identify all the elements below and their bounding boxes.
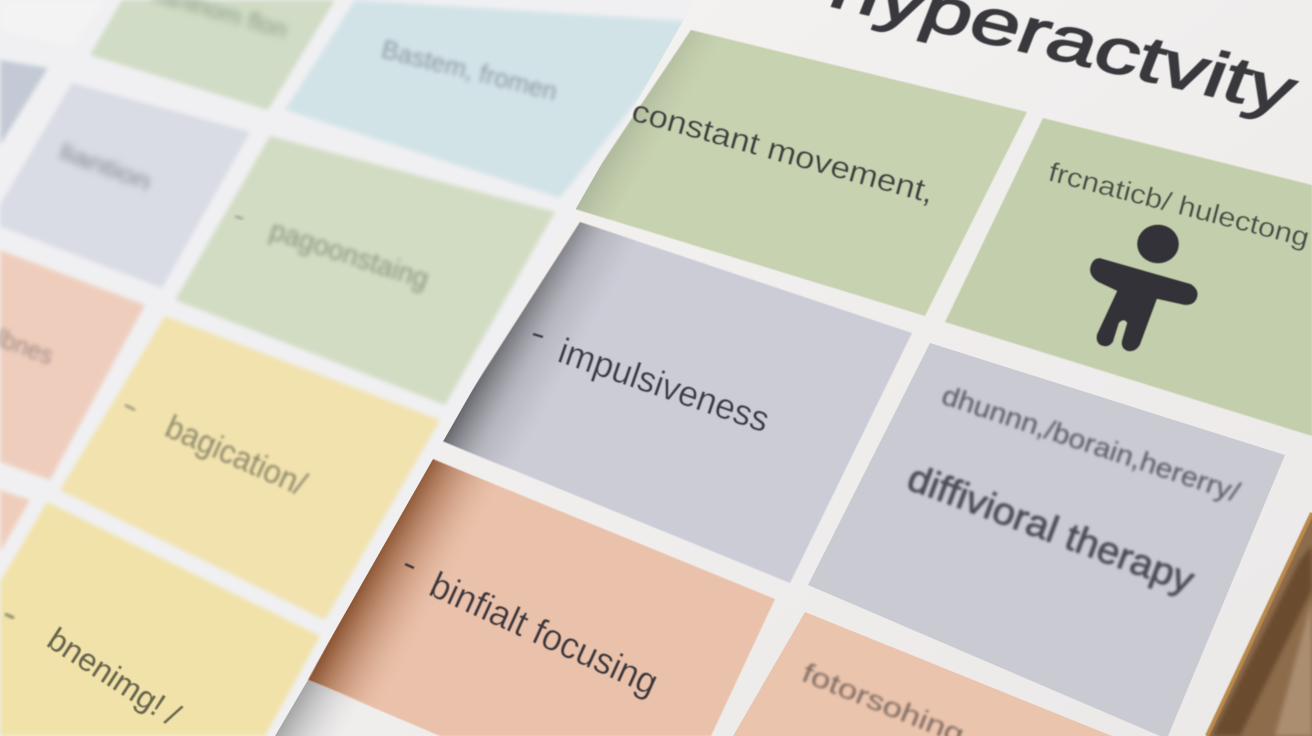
- cell: icon card: [945, 118, 1312, 436]
- label: therapy small text: dhunnn,/borain,hererry/: [938, 379, 1244, 508]
- cell: top corner: [0, 0, 105, 48]
- right sheet: [275, 0, 1312, 736]
- label: focusing: binfialt focusing: [424, 564, 665, 703]
- cell: bottom peach: [733, 612, 1112, 736]
- label: bottom peach text: fotorsohing: [798, 657, 969, 736]
- blurred left text: pagoonstaing: [266, 214, 433, 296]
- sheet golden edge: [1207, 513, 1312, 736]
- blurred left text: bnenimg! /: [41, 621, 187, 733]
- cell: top green: [90, 0, 335, 110]
- wood table: [1190, 500, 1312, 736]
- bullet dash: [533, 334, 543, 337]
- cell: peach left: [0, 250, 145, 480]
- cell: mid green: [175, 136, 555, 405]
- label: therapy heading: diffivioral therapy: [902, 457, 1199, 602]
- cell: impulsiveness: [440, 222, 912, 583]
- left sheet: [0, 0, 700, 736]
- blurred left text: [0, 0, 560, 733]
- blurred left text: bagication/: [160, 408, 313, 503]
- sheet paper: [275, 0, 1312, 736]
- cell: difficult focusing: [308, 457, 775, 736]
- label: icon card text: frcnaticb/ hulectong: [1045, 157, 1312, 253]
- cell: yellow: [60, 316, 440, 620]
- label: impulsiveness: impulsiveness: [553, 330, 775, 440]
- cell: lower yellow: [0, 502, 320, 736]
- left sheet paper: [275, 157, 606, 736]
- cell: constant movement: [572, 30, 1027, 316]
- label: constant movement: constant movement,: [628, 93, 938, 210]
- blurred left cells: [0, 0, 700, 736]
- cell: grey top left: [0, 60, 48, 145]
- blurred left text: liantion: [56, 138, 154, 196]
- icon: person: [1090, 224, 1198, 351]
- cell: grey: [0, 83, 250, 288]
- cell: blue: [285, 0, 700, 198]
- bullet dash: [405, 564, 414, 568]
- cell: therapy: [808, 343, 1285, 736]
- blurred left text: Bastem, fromen: [379, 34, 560, 106]
- cell: peach lower left: [0, 490, 30, 552]
- bottom shadow on paper: [275, 680, 440, 736]
